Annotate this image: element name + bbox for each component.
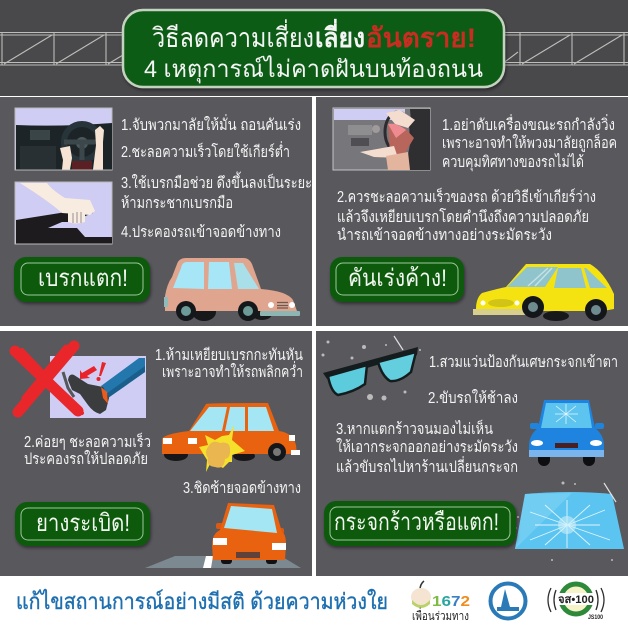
label button: cracked windshield xyxy=(324,501,516,546)
step text: ให้เอากระจกออกอย่างระมัดระวัง xyxy=(336,438,518,456)
image: hands on steering wheel xyxy=(15,108,112,170)
step text: 3.หากแตกร้าวจนมองไม่เห็น xyxy=(336,419,493,438)
logo: JS100 radio: จส•100 xyxy=(558,594,594,606)
icon: red X xyxy=(15,346,82,413)
step text: นำรถเข้าจอดข้างทางอย่างระมัดระวัง xyxy=(337,227,552,244)
label button: stuck accelerator: คันเร่งค้าง! xyxy=(348,265,447,292)
step text: ห้ามกระชากเบรกมือ xyxy=(121,194,233,212)
icon: cracked windshield xyxy=(514,482,624,561)
label button: brake failure xyxy=(14,257,150,302)
step text: 3.ชิดซ้ายจอดข้างทาง xyxy=(183,480,301,497)
logo: 1672: เพื่อนร่วมทาง xyxy=(412,607,469,623)
logo: JS100 radio: JS100 xyxy=(588,615,604,621)
title line 2: 4 เหตุการณ์ไม่คาดฝันบนท้องถนน xyxy=(144,55,483,84)
step text: 1.จับพวกมาลัยให้มั่น ถอนคันเร่ง xyxy=(121,114,301,134)
footer xyxy=(16,581,604,623)
label button: tyre blowout xyxy=(15,502,150,546)
car: blue with cracked windshield xyxy=(529,400,604,466)
logo: JS100 radio xyxy=(548,584,604,621)
panel: tyre blowout xyxy=(0,331,312,576)
step text: ควบคุมทิศทางของรถไม่ได้ xyxy=(442,153,584,172)
step text: 2.ค่อยๆ ชะลอความเร็ว xyxy=(24,432,151,451)
car: beige xyxy=(164,258,300,321)
step text: 3.ใช้เบรกมือช่วย ดึงขึ้นลงเป็นระยะ xyxy=(121,171,312,192)
panel: brake failure xyxy=(0,97,312,326)
title line 1: วิธีลดความเสี่ยง xyxy=(152,19,314,53)
title line 1: อันตราย! xyxy=(366,23,476,53)
image: driver switching off xyxy=(333,108,430,170)
car: yellow xyxy=(473,264,614,321)
logo: department emblem xyxy=(490,584,526,618)
step text xyxy=(24,347,303,497)
road and car parked at roadside xyxy=(145,503,301,568)
title sign xyxy=(123,10,504,87)
step text: แล้วขับรถไปหาร้านเปลี่ยนกระจก xyxy=(336,456,518,476)
step text: 1.ห้ามเหยียบเบรกกะทันหัน xyxy=(155,347,303,364)
panel: cracked windshield xyxy=(316,331,628,576)
truss: left and right overhead gantry xyxy=(0,32,628,65)
logo: 1672: 1672 xyxy=(432,593,470,610)
step text: 4.ประคองรถเข้าจอดข้างทาง xyxy=(121,224,281,241)
icon: tyre burst explosion xyxy=(199,425,245,472)
title line 1: เลี่ยง xyxy=(315,18,365,53)
step text: ประคองรถให้ปลอดภัย xyxy=(24,450,148,468)
car: orange with burst tyre xyxy=(162,403,300,472)
label button: brake failure: เบรกแตก! xyxy=(38,265,128,292)
label button: stuck accelerator xyxy=(330,257,464,302)
step text xyxy=(121,114,312,241)
panel: stuck accelerator xyxy=(316,97,628,326)
step text xyxy=(337,114,617,244)
step text: เพราะอาจทำให้รถพลิกคว่ำ xyxy=(162,361,303,381)
label button: cracked windshield: กระจกร้าวหรือแตก! xyxy=(334,509,499,536)
header background xyxy=(0,0,628,96)
label button: tyre blowout: ยางระเบิด! xyxy=(36,510,130,537)
step text: 2.ชะลอความเร็วโดยใช้เกียร์ต่ำ xyxy=(121,141,290,161)
title line 1 xyxy=(152,18,476,53)
icon: sunglasses with glass debris xyxy=(322,336,421,400)
logo: 1672 xyxy=(411,581,470,623)
slogan: แก้ไขสถานการณ์อย่างมีสติ ด้วยความห่วงใย xyxy=(16,589,388,614)
step text: แล้วจึงเหยียบเบรกโดยคำนึงถึงความปลอดภัย xyxy=(337,208,589,226)
image: foot on brake pedal xyxy=(50,356,146,418)
image: hand on handbrake xyxy=(15,182,112,244)
step text: 2.ขับรถให้ช้าลง xyxy=(428,389,518,407)
step text xyxy=(336,354,618,476)
